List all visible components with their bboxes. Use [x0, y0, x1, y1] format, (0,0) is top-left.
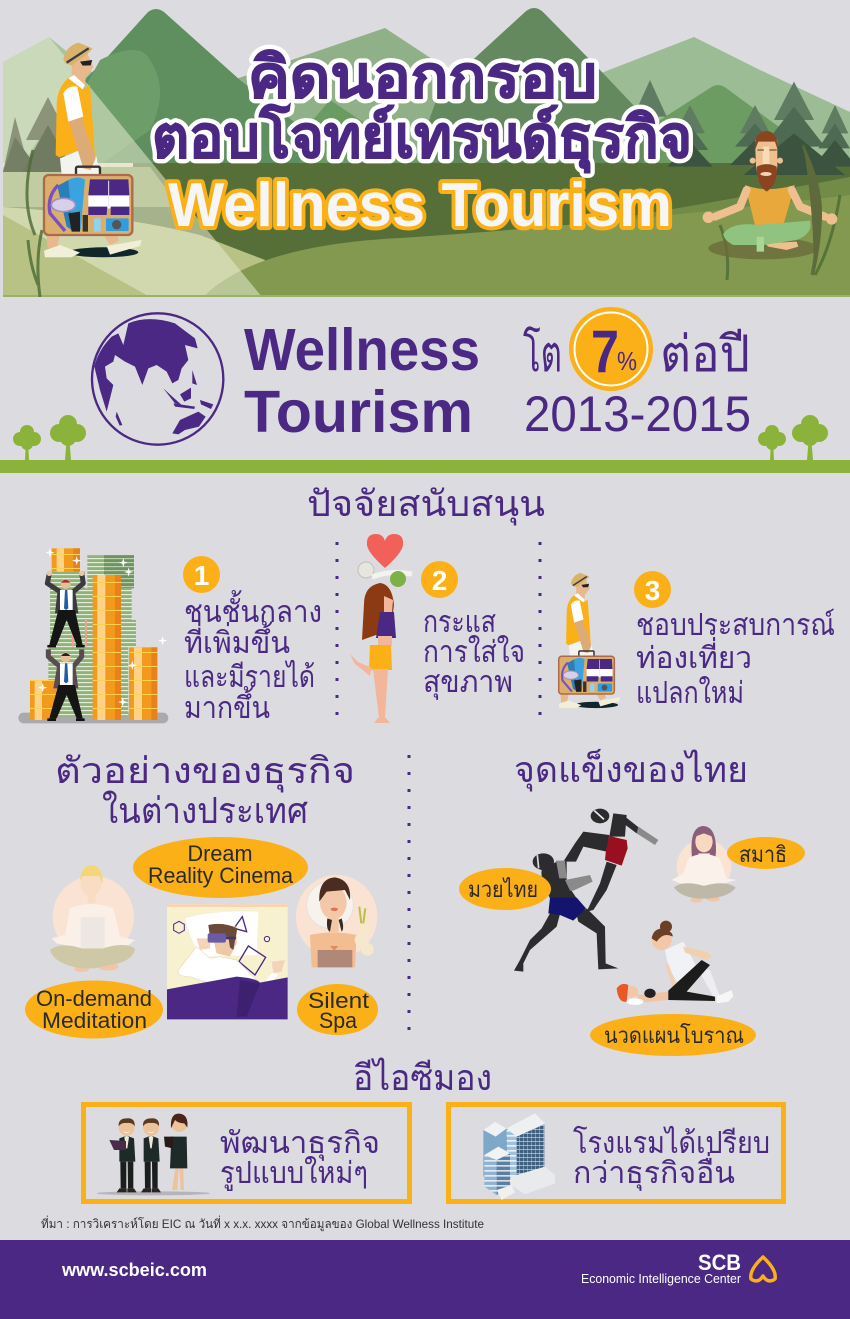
- factor 1: ชนชั้นกลาง: [184, 590, 322, 629]
- label: Dream Reality Cinema: [133, 837, 308, 898]
- label: On-demand Meditation: On-demand: [36, 986, 152, 1011]
- label: Dream Reality Cinema: Dream: [188, 841, 252, 866]
- lower businessman: [47, 649, 85, 721]
- factor 3: ท่องเที่ยว: [636, 637, 752, 675]
- panel: hotels have an edge: กว่าธุรกิจอื่น: [573, 1152, 735, 1192]
- growth stat: 7% per year: %: [617, 346, 637, 376]
- label: Silent Spa: [297, 984, 378, 1035]
- label: Muay Thai: [459, 868, 551, 910]
- growth stat: 7% per year: ต่อปี: [660, 326, 750, 382]
- icon: meditating person: [50, 865, 135, 972]
- label: Dream Reality Cinema: Reality Cinema: [148, 863, 294, 888]
- icon: VR bed: [167, 904, 288, 1019]
- label: Silent Spa: Silent: [308, 988, 369, 1013]
- factor 2: [421, 561, 525, 701]
- title: ตอบโจทย์เทรนด์ธุรกิจ: [152, 102, 692, 174]
- icon: woman stretching: [350, 583, 396, 723]
- icon: money stacks and businessmen: [18, 548, 168, 723]
- hero: grass blades: [27, 145, 840, 297]
- panel: hotels have an edge: โรงแรมได้เปรียบ: [573, 1125, 770, 1160]
- heading: overseas business examples: [55, 750, 355, 831]
- label: On-demand Meditation: Meditation: [42, 1008, 147, 1033]
- trees and ground strip: [0, 415, 850, 473]
- footer: Economic Intelligence Center: [581, 1271, 742, 1286]
- footer: SCB: [698, 1250, 741, 1275]
- growth stat: 7% per year: 7: [591, 318, 619, 385]
- panel: new business models: พัฒนาธุรกิจ: [220, 1127, 380, 1162]
- icon: hotel buildings: [483, 1113, 555, 1200]
- factor 1: [183, 556, 322, 725]
- factor 2: 2: [432, 565, 447, 596]
- divider dots: [337, 542, 540, 1036]
- title: Wellness Tourism: [168, 171, 672, 240]
- label: Silent Spa: Spa: [319, 1008, 358, 1033]
- hero: distant mountains: [3, 8, 850, 163]
- growth stat: 7% per year: [523, 307, 751, 442]
- footer: [0, 1240, 850, 1319]
- heading: EIC view: อีไอซีมอง: [353, 1057, 492, 1098]
- factor 1: 1: [194, 560, 209, 591]
- factor 3: [634, 571, 835, 710]
- upper businessman: [47, 571, 85, 647]
- hero: pine trees right: [633, 80, 850, 175]
- label: traditional massage: นวดแผนโบราณ: [604, 1023, 744, 1048]
- title: ตอบโจทย์เทรนด์ธุรกิจ: [152, 102, 692, 174]
- icon: globe: [92, 313, 223, 445]
- icon: small traveller: [559, 573, 620, 708]
- icon: meditating man: [703, 131, 837, 277]
- label: traditional massage: [590, 1014, 756, 1056]
- panel: new business models: [84, 1104, 410, 1202]
- heading: Wellness Tourism: Tourism: [244, 379, 473, 445]
- factor 2: การใส่ใจ: [423, 635, 525, 669]
- factor 3: แปลกใหม่: [636, 676, 744, 710]
- icon: traveller with suitcase: [44, 43, 142, 257]
- factor 1: และมีรายได้: [184, 659, 315, 694]
- factor 3: 3: [645, 575, 660, 606]
- factor 2: กระแส: [423, 606, 496, 639]
- icon: heart and tape measure: [358, 534, 412, 587]
- heading: Thai strengths: จุดแข็งของไทย: [514, 747, 748, 792]
- label: On-demand Meditation: [25, 980, 163, 1038]
- footer: www.scbeic.com: [61, 1260, 207, 1280]
- hero: pine trees left: [3, 97, 66, 172]
- panel: hotels have an edge: [448, 1104, 784, 1202]
- heading: overseas business examples: ตัวอย่างของธุรกิจ: [55, 750, 355, 793]
- label: meditation: [727, 837, 805, 869]
- title: คิดนอกกรอบ: [248, 45, 597, 110]
- title: [152, 45, 692, 240]
- source note: ที่มา : การวิเคราะห์โดย EIC ณ วันที่ x x.x. xxxx จากข้อมูลของ Global Wellness Institute: [41, 1215, 484, 1232]
- icon: spa woman: [296, 875, 377, 967]
- factor 2: สุขภาพ: [423, 666, 513, 701]
- panel: new business models: รูปแบบใหม่ๆ: [220, 1156, 368, 1191]
- icon: meditating woman: [672, 826, 737, 903]
- icon: Thai massage: [617, 921, 733, 1005]
- title: คิดนอกกรอบ: [248, 45, 597, 110]
- heading: Wellness Tourism: Wellness: [244, 317, 480, 383]
- icon: SCB logo: [751, 1257, 775, 1281]
- label: meditation: สมาธิ: [739, 842, 787, 867]
- hero landscape: [3, 8, 850, 297]
- icon: Muay Thai fighters: [514, 809, 658, 972]
- growth stat: 7% per year: โต: [523, 326, 562, 382]
- heading: overseas business examples: ในต่างประเทศ: [102, 790, 308, 831]
- label: Muay Thai: มวยไทย: [468, 877, 538, 902]
- heading: supporting factors: ปัจจัยสนับสนุน: [307, 483, 545, 526]
- factor 1: ที่เพิ่มขึ้น: [184, 621, 290, 660]
- icon: business people: [97, 1114, 210, 1195]
- factor 1: มากขึ้น: [184, 686, 270, 725]
- hero: ground and hills: [3, 37, 850, 297]
- heading: Wellness Tourism: [244, 317, 480, 445]
- growth stat: 7% per year: 2013-2015: [524, 386, 751, 442]
